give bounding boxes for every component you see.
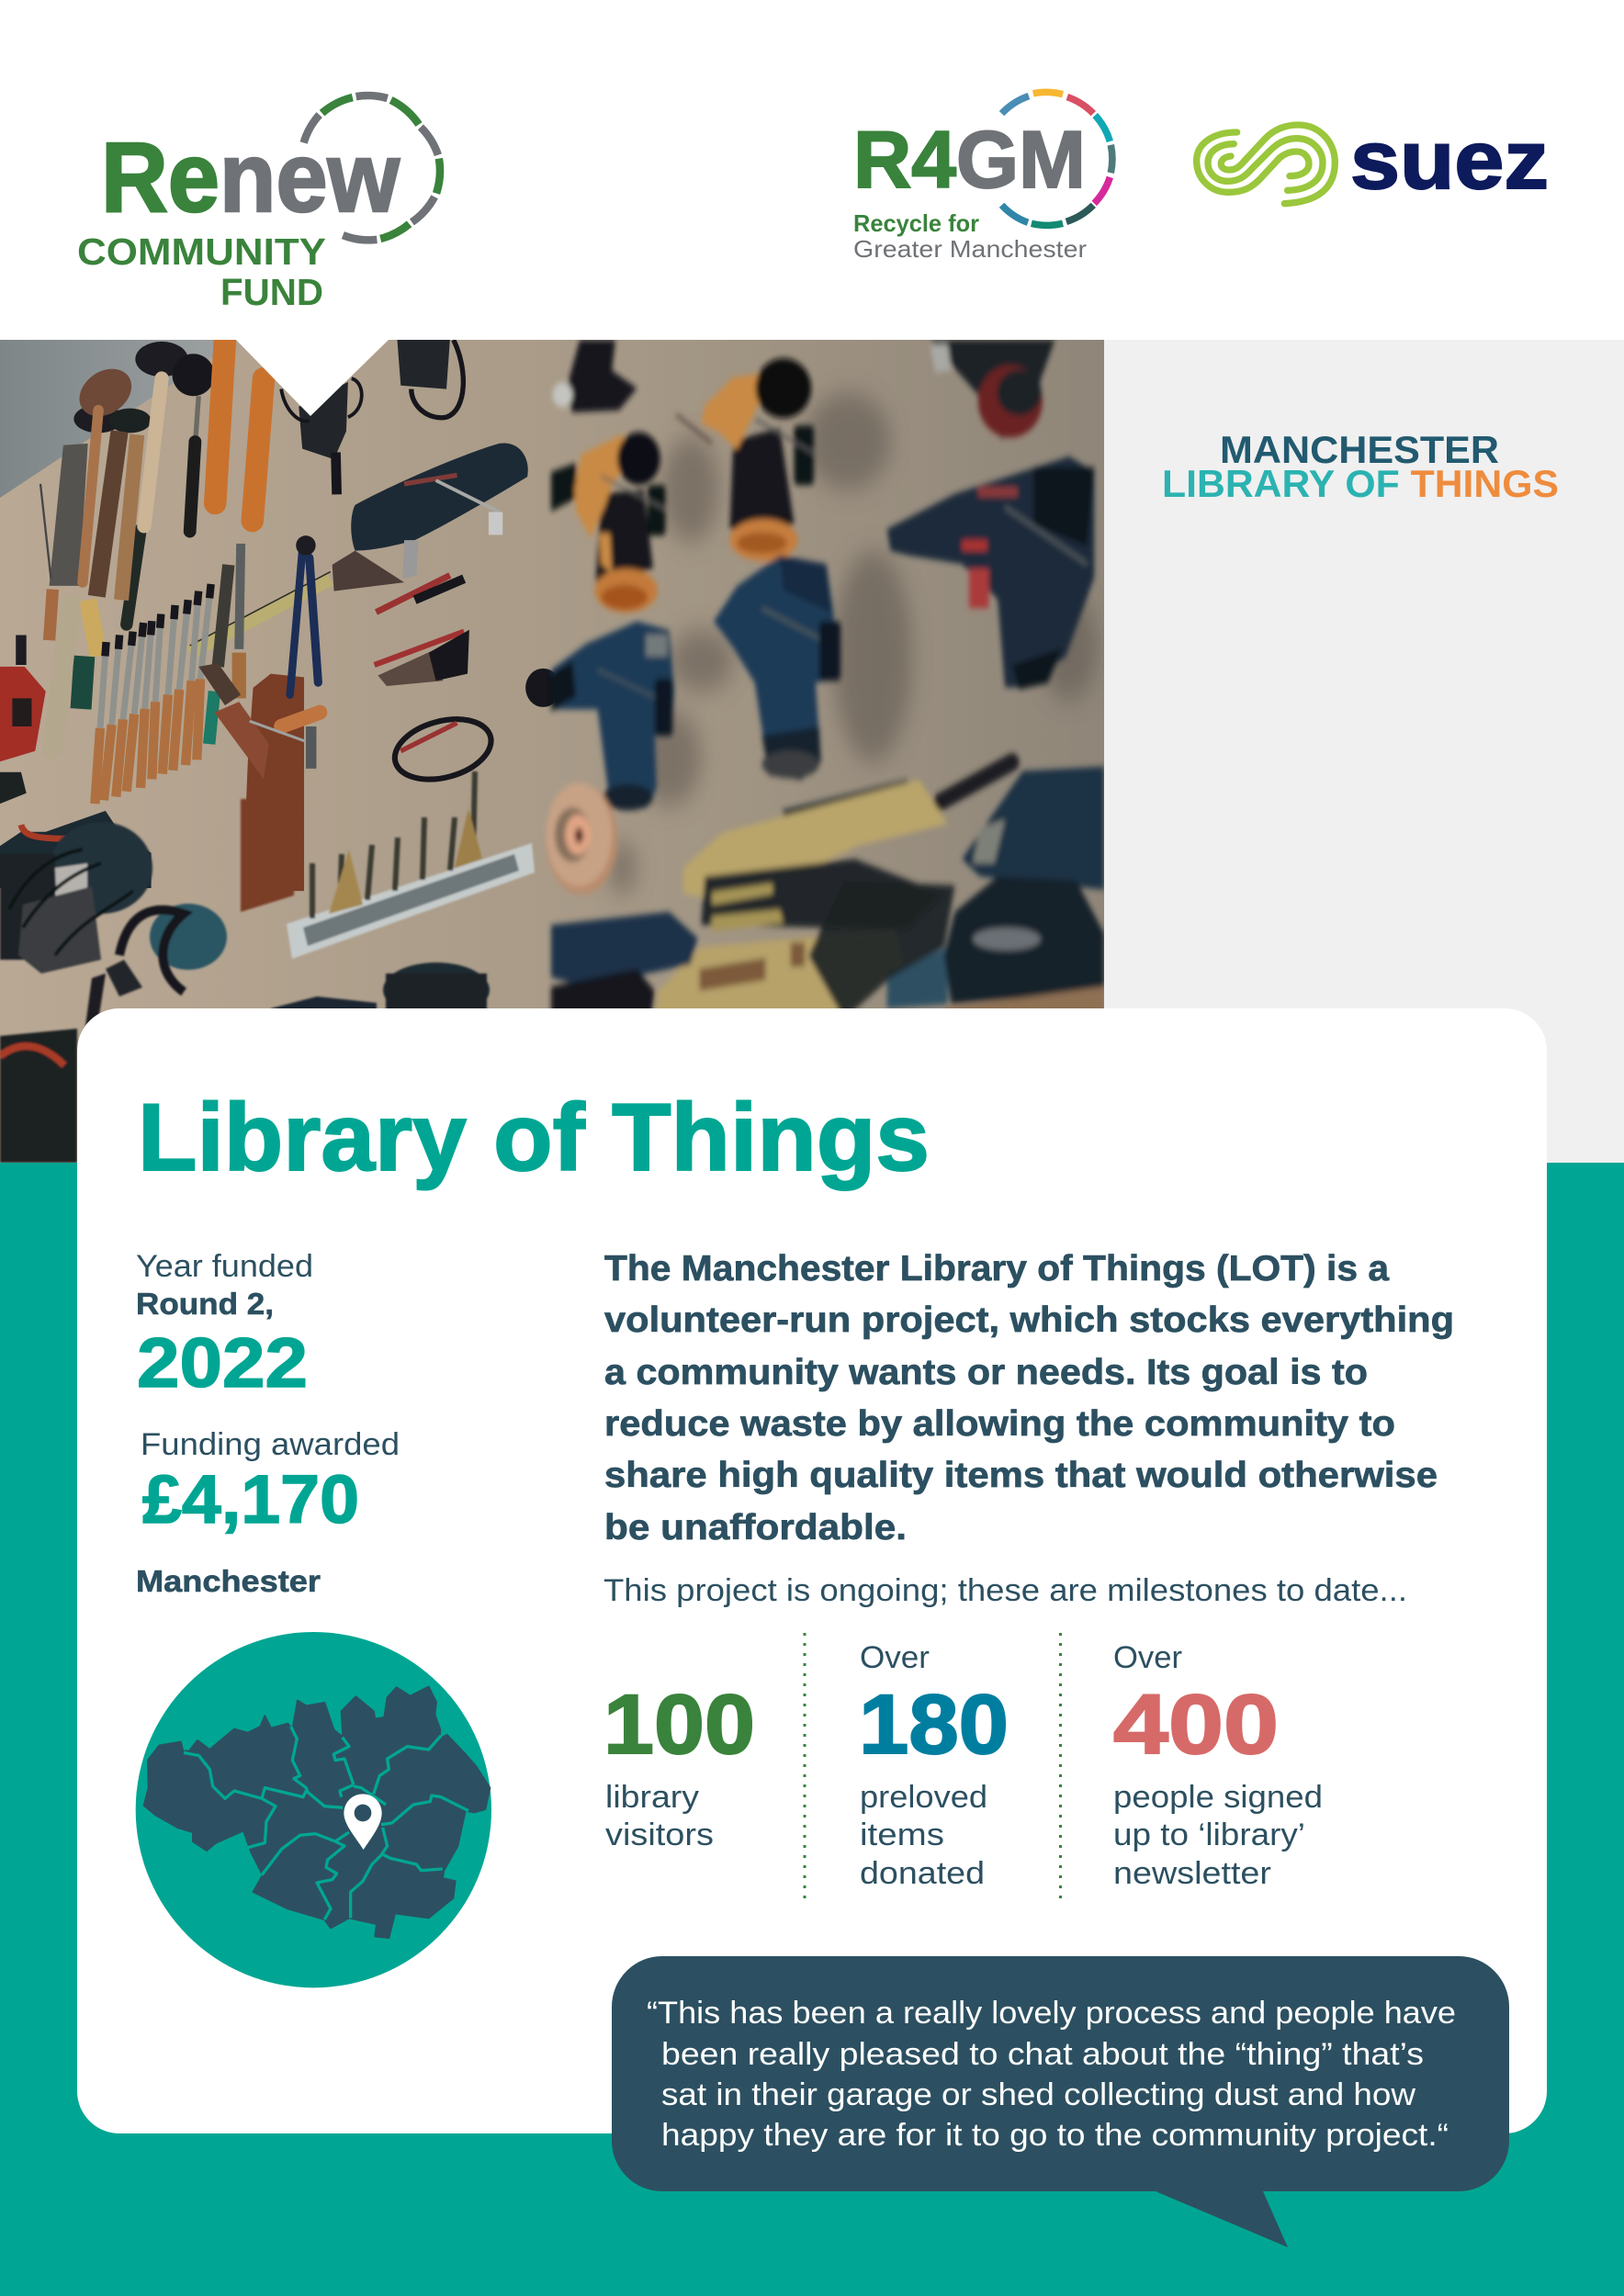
grey side panel: [1104, 340, 1624, 1163]
project description: [604, 1249, 1454, 1548]
left column: funding facts: [136, 1249, 400, 1598]
quote speech bubble: [612, 1956, 1509, 2247]
project description: volunteer-run project, which stocks everything: [604, 1300, 1454, 1340]
stat: over 400 people signed up to newsletter: Over: [1113, 1640, 1182, 1675]
location name: Manchester: [136, 1564, 321, 1598]
lower-left tools: [0, 771, 535, 1163]
logo: R4GM Recycle for Greater Manchester: [853, 92, 1112, 263]
R4GM wordmark: R4GM: [853, 114, 1086, 205]
logo: SUEZ: [1197, 115, 1549, 207]
funding awarded: £4,170: [142, 1461, 359, 1537]
year funded: [136, 1249, 313, 1402]
stat: 100 library visitors: visitors: [605, 1818, 714, 1852]
year funded: 2022: [137, 1324, 308, 1402]
project description: a community wants or needs. Its goal is to: [604, 1353, 1368, 1392]
quote text: happy they are for it to go to the community project.“: [661, 2118, 1449, 2153]
project description: The Manchester Library of Things (LOT) is a: [604, 1249, 1389, 1289]
stat: over 400 people signed up to newsletter: people signed: [1113, 1780, 1323, 1815]
teal lower background: [0, 1163, 1624, 2296]
stat: over 400 people signed up to newsletter: [1113, 1640, 1323, 1891]
stat: over 400 people signed up to newsletter: up to ‘library’: [1113, 1818, 1305, 1852]
quote text: been really pleased to chat about the “thing” that’s: [661, 2037, 1424, 2072]
logo: R4GM Recycle for Greater Manchester: Greater Manchester: [853, 235, 1087, 263]
logo: Manchester Library of Things: LIBRARY OF THINGS: [1162, 462, 1559, 505]
funding awarded: [141, 1427, 400, 1537]
location pin: [344, 1794, 382, 1850]
stat: 100 library visitors: library: [605, 1780, 699, 1815]
stat: over 180 preloved items donated: 180: [859, 1678, 1009, 1772]
R4GM strapline: Recycle for: [853, 209, 979, 237]
stat: 100 library visitors: 100: [603, 1678, 755, 1772]
logo: Manchester Library of Things: MANCHESTER: [1220, 428, 1499, 471]
SUEZ green swirl icon: [1197, 125, 1335, 204]
stat: over 400 people signed up to newsletter: newsletter: [1113, 1856, 1271, 1891]
quote text: sat in their garage or shed collecting dust and how: [661, 2077, 1415, 2112]
project description: be unaffordable.: [604, 1508, 907, 1548]
logo: Renew Community Fund: FUND: [220, 271, 323, 313]
stat: over 180 preloved items donated: [859, 1640, 1009, 1891]
year funded: Year funded: [136, 1249, 313, 1284]
stat: over 180 preloved items donated: preloved: [860, 1780, 987, 1815]
Community Fund label: COMMUNITY: [77, 231, 326, 273]
stat: over 180 preloved items donated: Over: [860, 1640, 930, 1675]
R4GM coloured ring: [1002, 92, 1112, 225]
year funded: Round 2,: [136, 1287, 274, 1321]
Renew wordmark: Renew: [101, 121, 400, 232]
logo: Renew Community Fund: [77, 96, 440, 313]
stat: over 400 people signed up to newsletter: 400: [1113, 1678, 1279, 1772]
project description: share high quality items that would otherwise: [604, 1456, 1438, 1495]
white notch pointing from Renew logo into the photo: [236, 340, 389, 416]
stat: over 180 preloved items donated: items: [860, 1818, 944, 1852]
stat: over 180 preloved items donated: donated: [860, 1856, 985, 1891]
project description: reduce waste by allowing the community to: [604, 1404, 1395, 1444]
map of Greater Manchester in teal circle: [136, 1632, 491, 1987]
milestones intro: This project is ongoing; these are milestones to date...: [603, 1573, 1407, 1608]
funding awarded: Funding awarded: [141, 1427, 400, 1462]
quote text: [647, 1996, 1456, 2153]
logo: Manchester Library of Things: [1162, 428, 1559, 505]
SUEZ wordmark: suez: [1350, 115, 1549, 207]
white content card: [77, 1008, 1547, 2133]
title: Library of Things: [138, 1085, 930, 1191]
Renew dashed ring: [304, 96, 440, 240]
photo: wall of hanging tools: [0, 340, 1104, 1163]
stat: 100 library visitors: [603, 1678, 755, 1852]
quote text: “This has been a really lovely process and people have: [647, 1996, 1456, 2031]
